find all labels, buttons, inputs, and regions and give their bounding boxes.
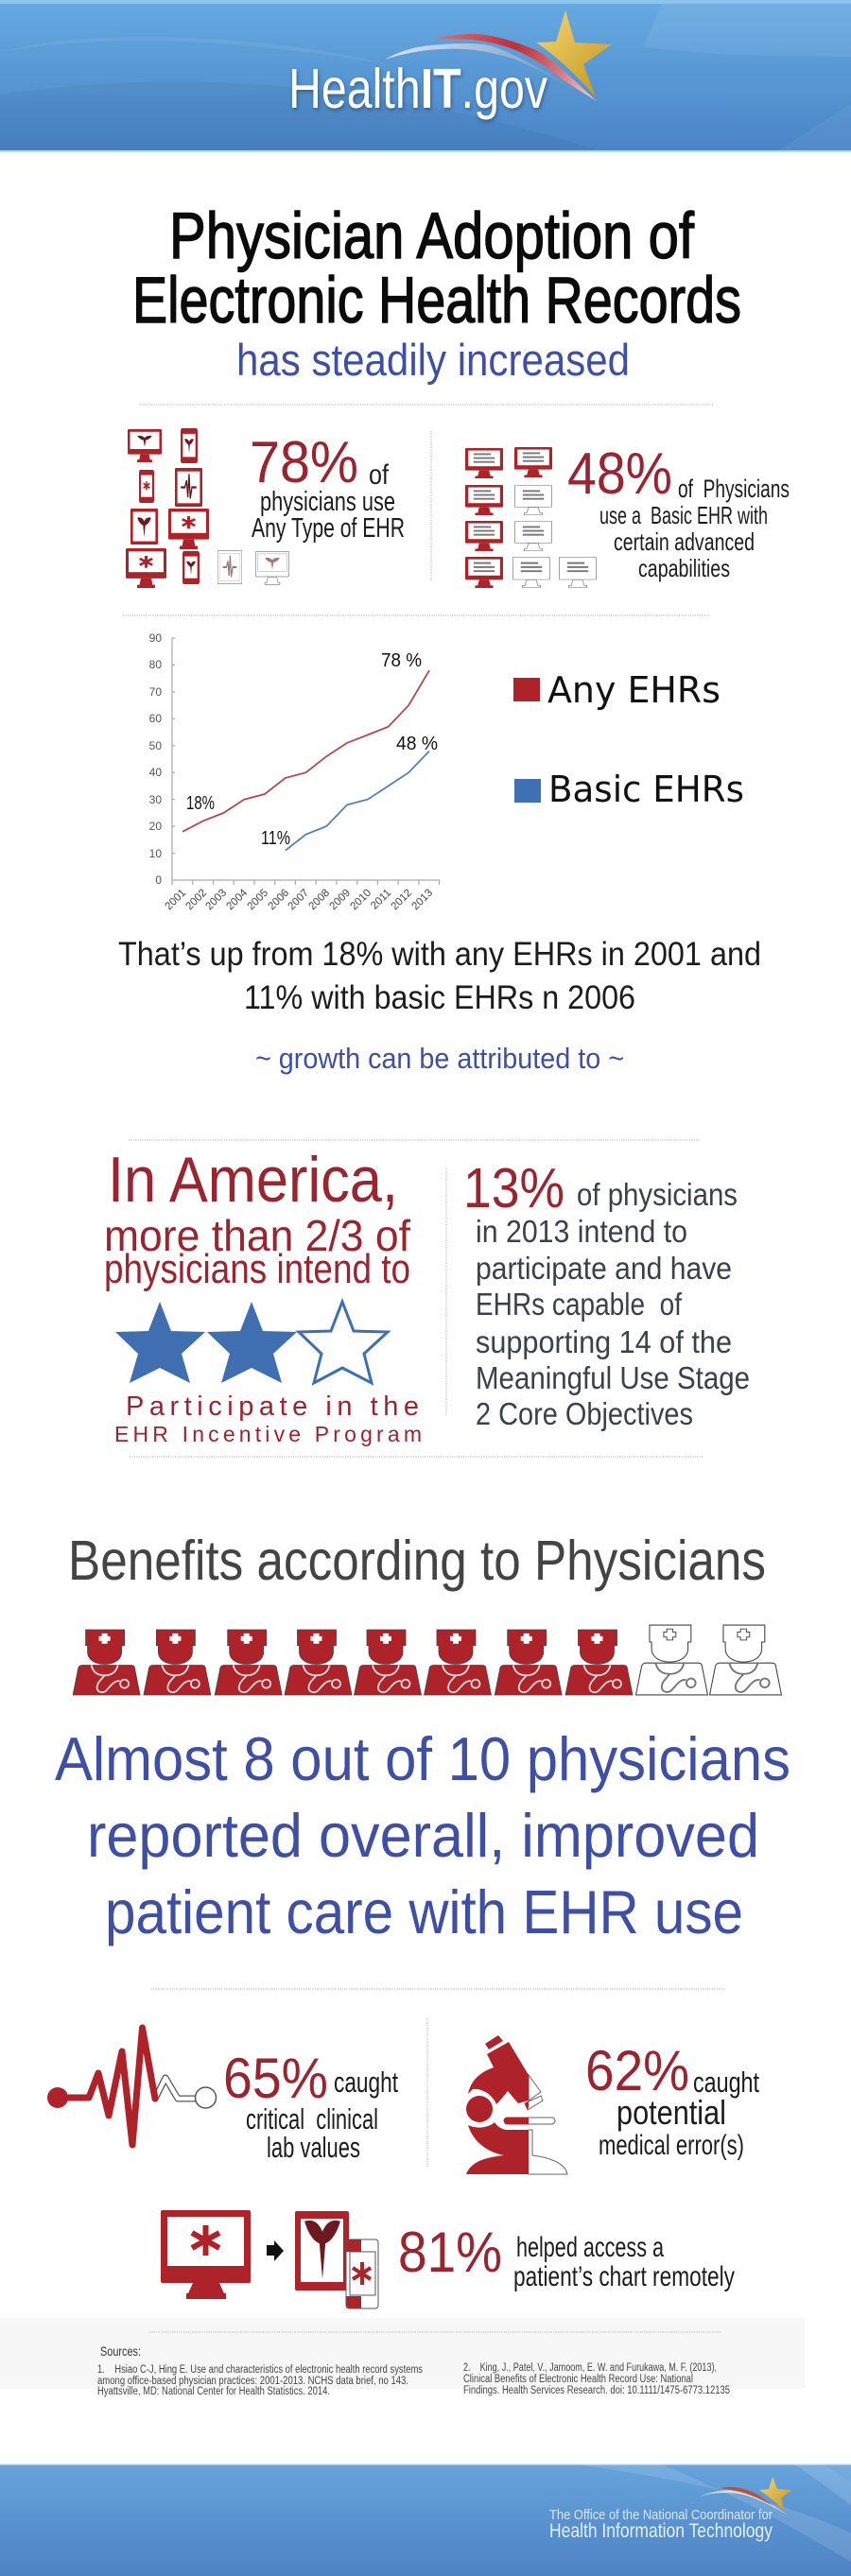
icon row: 8 of 10 doctors xyxy=(73,1625,781,1695)
line chart: EHR adoption 2001-2013: 20 xyxy=(149,820,162,833)
line chart: EHR adoption 2001-2013: 2008 xyxy=(307,888,332,912)
panel: 13% of physicians: supporting 14 of the xyxy=(476,1324,732,1359)
footer logo xyxy=(700,2477,791,2515)
stat text xyxy=(567,441,790,582)
source 1: 1. Hsiao C-J, Hing E. Use and characteristics of electronic health record systems xyxy=(97,2364,423,2376)
line chart: EHR adoption 2001-2013: 2009 xyxy=(328,888,353,912)
icon grid: record monitors xyxy=(465,447,597,588)
sources heading: Sources: xyxy=(100,2344,141,2359)
panel: 13% of physicians: Meaningful Use Stage xyxy=(476,1360,750,1395)
panel: 62% medical errors: caught xyxy=(693,2066,759,2099)
headline: 8 out of 10 physicians: Almost 8 out of 10 physicians xyxy=(55,1724,790,1793)
text block: growth summary: That’s up from 18% with any EHRs in 2001 and xyxy=(118,936,761,973)
headline: 8 out of 10 physicians xyxy=(55,1724,790,1946)
line chart: EHR adoption 2001-2013: 48 % xyxy=(396,734,438,754)
header banner xyxy=(0,0,851,152)
stat text: 48% xyxy=(567,441,672,507)
line chart: EHR adoption 2001-2013: 60 xyxy=(149,712,162,725)
panel: 62% medical errors: potential xyxy=(617,2093,726,2132)
panel: 13% of physicians: EHRs capable of xyxy=(476,1287,683,1322)
panel: sources xyxy=(0,2318,805,2397)
footer text: The Office of the National Coordinator for xyxy=(549,2507,773,2523)
panel: 65% lab values: lab values xyxy=(267,2131,360,2164)
line chart: EHR adoption 2001-2013: 2002 xyxy=(184,888,209,912)
chart legend xyxy=(513,669,744,810)
heading: in America xyxy=(104,1144,410,1292)
source 2: Findings. Health Services Research. doi: 10.1111/1475-6773.12135 xyxy=(463,2385,730,2396)
footer banner: Health Information Technology xyxy=(549,2520,773,2542)
headline: 8 out of 10 physicians: patient care with EHR use xyxy=(105,1877,743,1946)
footer banner xyxy=(0,2464,851,2576)
panel: 81% remote access: helped access a xyxy=(516,2232,664,2263)
line chart: EHR adoption 2001-2013: 2005 xyxy=(246,888,270,912)
heading: in America: physicians intend to xyxy=(104,1246,410,1292)
line chart: EHR adoption 2001-2013: 2011 xyxy=(369,888,393,912)
text block: growth summary xyxy=(118,936,761,1016)
line chart: EHR adoption 2001-2013: 0 xyxy=(155,873,162,887)
line chart: EHR adoption 2001-2013: 2003 xyxy=(204,888,229,912)
line chart: EHR adoption 2001-2013: 78 % xyxy=(381,650,422,671)
icon: desktop monitor xyxy=(161,2210,251,2299)
stat text: certain advanced xyxy=(614,527,755,556)
line chart: EHR adoption 2001-2013: 30 xyxy=(149,793,162,806)
heading: in America: more than 2/3 of xyxy=(104,1211,410,1260)
source 1 xyxy=(97,2364,423,2397)
caption: incentive program xyxy=(114,1392,422,1446)
stat text: 78% xyxy=(250,430,358,495)
stat text: 65% xyxy=(223,2047,328,2110)
source 2: 2. King, J., Patel, V., Jamoom, E. W. and Furukawa, M. F. (2013), xyxy=(463,2362,717,2374)
stat text: Any Type of EHR xyxy=(252,513,405,544)
icon: heartbeat line xyxy=(47,2028,216,2145)
panel: 62% medical errors: medical error(s) xyxy=(599,2130,744,2161)
line chart: EHR adoption 2001-2013: 2013 xyxy=(410,888,435,912)
icon: tablet and phone xyxy=(295,2211,378,2308)
stat text: physicians use xyxy=(260,487,395,517)
panel: 81% remote access xyxy=(161,2210,735,2308)
logo: HealthIT.gov: HealthIT.gov xyxy=(288,58,547,120)
title xyxy=(132,199,741,385)
heading: in America: In America, xyxy=(108,1144,398,1216)
logo: HealthIT.gov xyxy=(288,10,612,120)
icon: three stars xyxy=(115,1302,388,1383)
source 1: Hyattsville, MD: National Center for Health Statistics. 2014. xyxy=(97,2386,330,2397)
panel: in America incentive program xyxy=(104,1144,422,1446)
panel: 78% any EHR xyxy=(126,428,405,588)
line chart: EHR adoption 2001-2013: 90 xyxy=(149,631,162,645)
line chart: EHR adoption 2001-2013: 10 xyxy=(149,847,162,860)
stat text: 62% xyxy=(585,2039,689,2102)
line chart: EHR adoption 2001-2013: 2010 xyxy=(349,888,373,912)
heading: benefits: Benefits according to Physicians xyxy=(68,1530,766,1592)
panel: 65% lab values: caught xyxy=(334,2066,398,2099)
line chart: EHR adoption 2001-2013: 70 xyxy=(149,685,162,699)
headline: 8 out of 10 physicians: reported overall, improved xyxy=(87,1801,759,1870)
caption: incentive program: EHR Incentive Program xyxy=(114,1422,422,1446)
stat text xyxy=(250,430,405,544)
arrow xyxy=(267,2240,284,2261)
text block: growth summary: 11% with basic EHRs n 2006 xyxy=(244,979,635,1016)
caption: incentive program: Participate in the xyxy=(126,1392,419,1422)
source 2 xyxy=(463,2362,730,2396)
line chart: EHR adoption 2001-2013: 2012 xyxy=(390,888,414,912)
subheading: growth attribution: ~ growth can be attributed to ~ xyxy=(255,1042,624,1075)
line chart: EHR adoption 2001-2013: 11% xyxy=(261,828,290,849)
panel: 13% of physicians: 2 Core Objectives xyxy=(476,1396,693,1431)
panel: 13% of physicians xyxy=(463,1157,750,1431)
line chart: EHR adoption 2001-2013: 18% xyxy=(186,793,215,814)
source 1: among office-based physician practices: 2001-2013. NCHS data brief, no 143. xyxy=(97,2376,408,2387)
icon: microscope xyxy=(466,2035,567,2174)
line chart: EHR adoption 2001-2013: 50 xyxy=(149,739,162,752)
stat text: of Physicians xyxy=(678,475,790,503)
icon grid: devices xyxy=(126,428,289,588)
panel: 65% lab values: critical clinical xyxy=(246,2102,378,2135)
panel: 81% remote access: patient’s chart remotely xyxy=(513,2261,735,2292)
panel: 62% medical errors xyxy=(466,2035,759,2174)
panel: 48% basic EHR xyxy=(465,441,790,588)
line chart: EHR adoption 2001-2013: 40 xyxy=(149,766,162,779)
panel: 13% of physicians: 13% xyxy=(463,1157,564,1219)
panel: 13% of physicians: in 2013 intend to xyxy=(476,1214,687,1249)
line chart: EHR adoption 2001-2013: 2004 xyxy=(225,887,251,912)
line chart: EHR adoption 2001-2013: 80 xyxy=(149,658,162,671)
line chart: EHR adoption 2001-2013: 2007 xyxy=(287,888,311,912)
line chart: EHR adoption 2001-2013: 2001 xyxy=(164,888,188,912)
panel: 13% of physicians: participate and have xyxy=(476,1251,732,1286)
panel: 13% of physicians: of physicians xyxy=(577,1177,738,1212)
line chart: EHR adoption 2001-2013 xyxy=(149,631,440,912)
stat text: use a Basic EHR with xyxy=(599,501,768,529)
source 2: Clinical Benefits of Electronic Health Record Use: National xyxy=(463,2374,693,2385)
title: Physician Adoption of xyxy=(169,199,695,272)
line chart: EHR adoption 2001-2013: 2006 xyxy=(267,888,291,912)
chart legend: Any EHRs xyxy=(547,669,721,711)
stat text: of xyxy=(369,459,390,491)
subtitle: has steadily increased xyxy=(236,335,630,385)
chart legend: Basic EHRs xyxy=(548,769,744,810)
stat text: 81% xyxy=(398,2221,502,2284)
stat text: capabilities xyxy=(638,554,730,582)
panel: 65% lab values xyxy=(47,2028,398,2164)
